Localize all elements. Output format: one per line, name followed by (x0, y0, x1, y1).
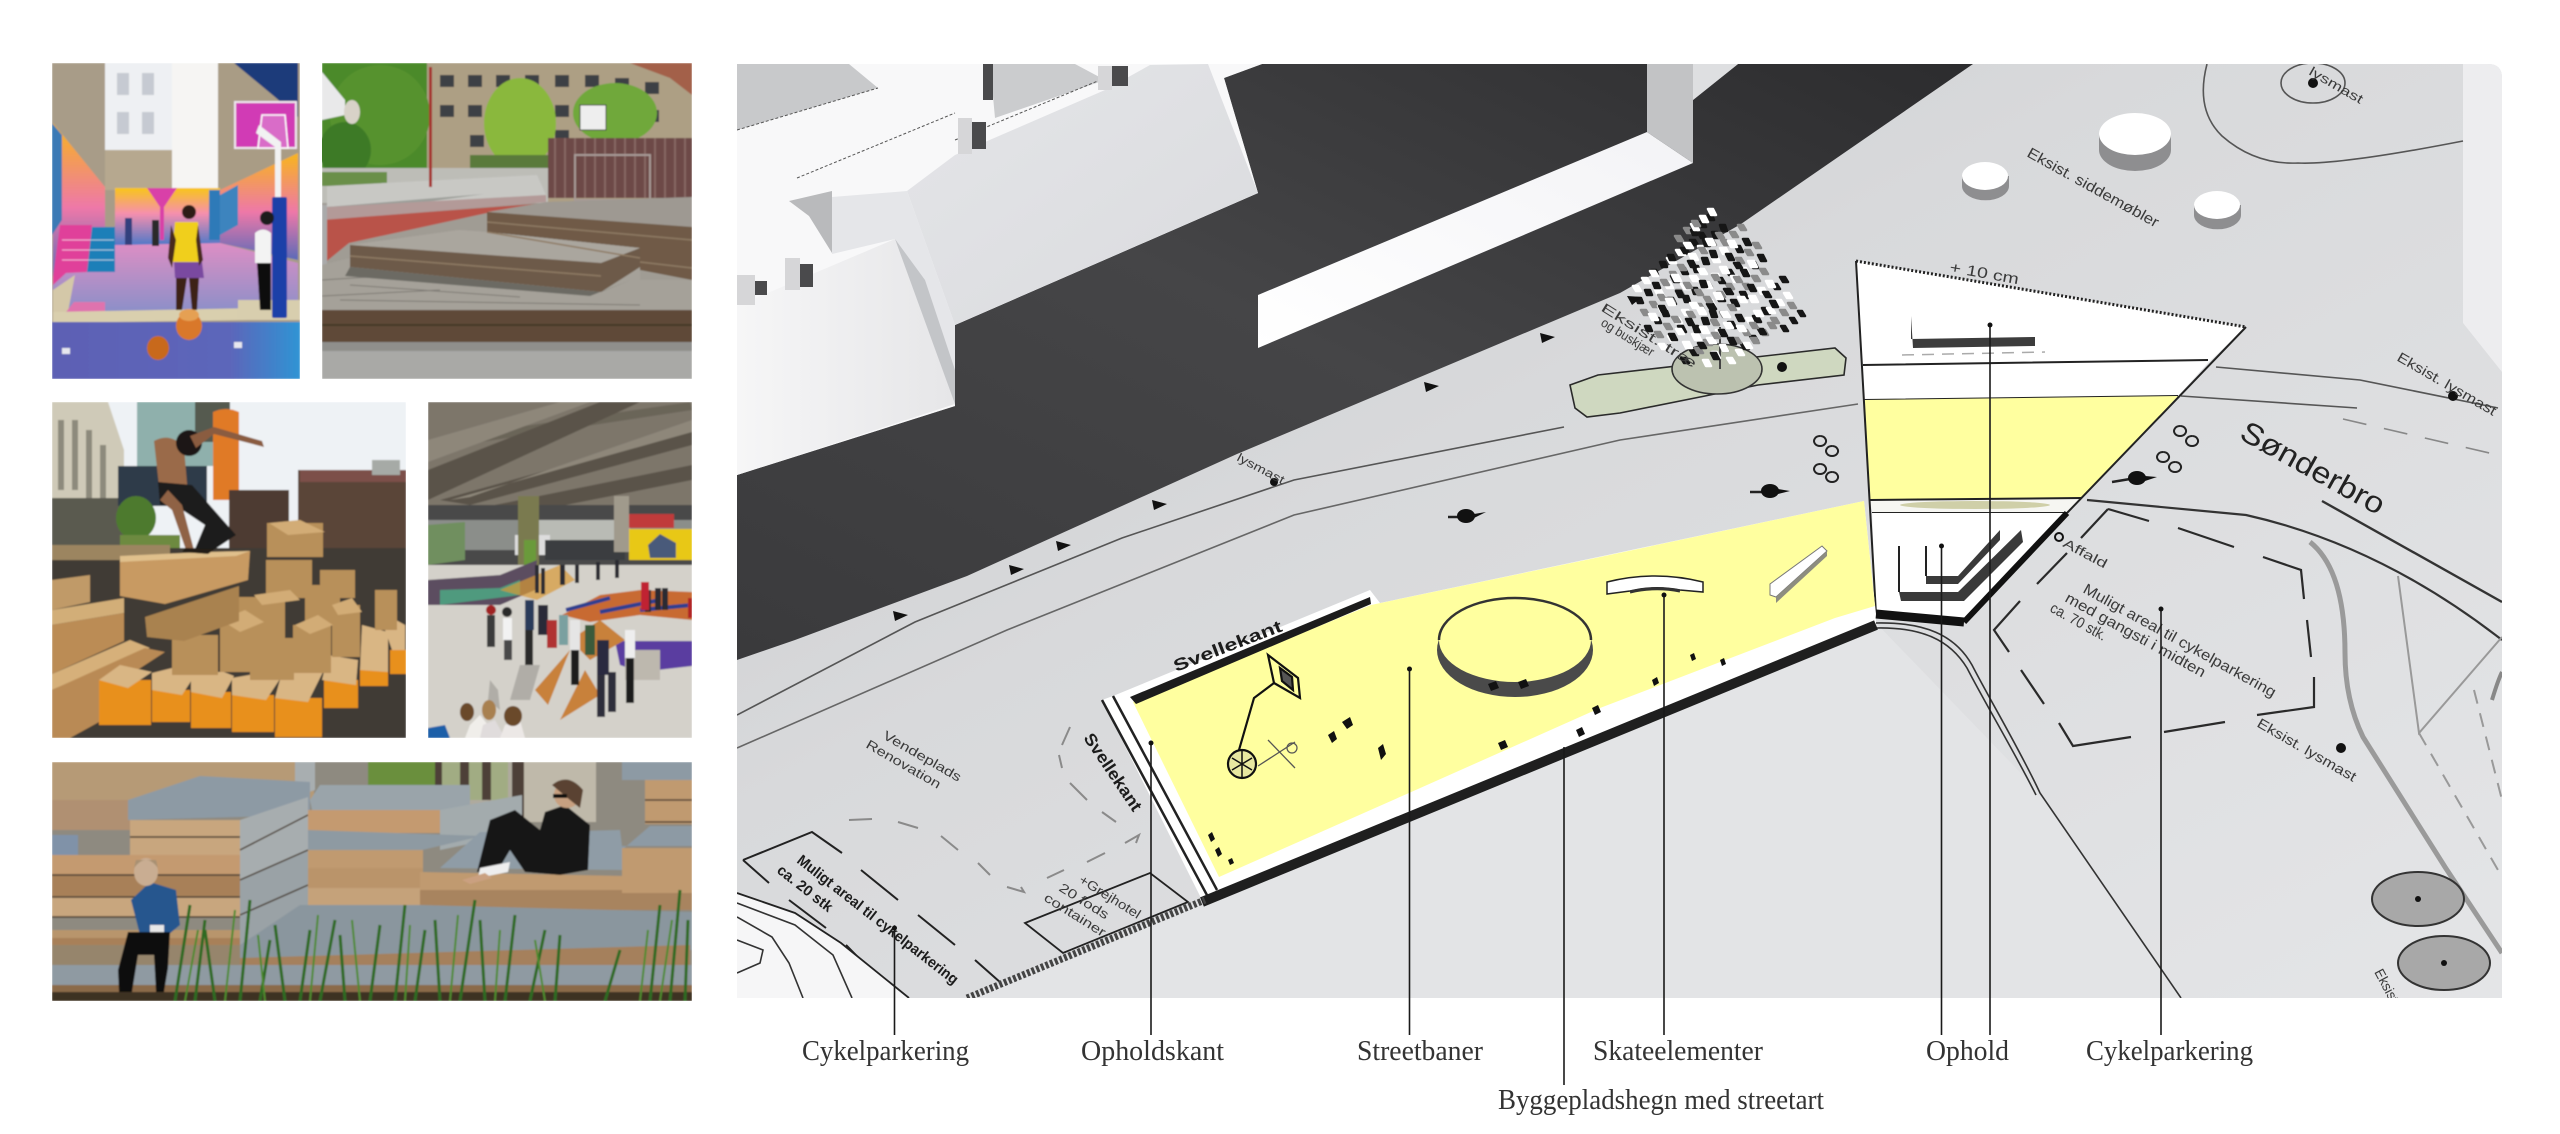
lamp dots (1270, 478, 1278, 486)
plan annotation texts: og buskjær (1598, 315, 1658, 360)
round planters (2372, 872, 2490, 990)
buildings: shadowed dark facades (737, 64, 1973, 660)
raised plaza: upper white terrace (1856, 261, 2246, 400)
plan annotation texts: container (1041, 890, 1109, 940)
plan annotation texts: Muligt areal til cykelparkering (794, 852, 962, 988)
plan annotation texts: Svellekant (1171, 617, 1285, 676)
photo: underpass street art gathering (428, 402, 692, 738)
bicycle symbols (1448, 426, 2198, 517)
plaza transition band (1870, 498, 2082, 513)
label: Cykelparkering: Cykelparkering (802, 1036, 969, 1067)
parking area left, container and turnaround linework (743, 727, 1188, 995)
plan annotation texts: Eksist. lysmast (2394, 349, 2500, 419)
svellekant and fence edges (967, 597, 1964, 998)
label: Streetbaner: Streetbaner (1357, 1036, 1484, 1067)
plan annotation texts: 20 fods (1056, 880, 1112, 923)
leader lines (892, 322, 2164, 1085)
photo: wooden stair deck at sports court (322, 63, 692, 379)
timber stack (172, 523, 397, 680)
girl (131, 882, 180, 935)
photo: colourful basketball court (52, 63, 300, 379)
plan annotation texts: Eksist. træ (1598, 300, 1700, 371)
plan annotation texts: Svellekant (1080, 730, 1146, 815)
plan annotation texts: Renovation (864, 737, 944, 792)
field markers and small symbols (893, 78, 2458, 865)
skate elements (1607, 546, 1827, 603)
basketball hoop and ball (1228, 655, 1300, 778)
plan annotation texts: Eksist. lysmast (2254, 715, 2360, 785)
plan annotation texts: lysmast (2306, 64, 2366, 107)
photo: timber terraced seating with people (52, 762, 692, 1001)
streetbaner: yellow field (1133, 501, 1875, 877)
plan annotation texts: ca. 20 stk (774, 862, 837, 916)
plan annotation texts: Eksist (2371, 966, 2402, 1005)
affald marker (2055, 533, 2063, 541)
plan linework: roads and curbs (737, 63, 2502, 998)
parking arrows (893, 296, 1642, 621)
site plan: 3D model of Sønderbro street area (737, 63, 2502, 1005)
plan annotation texts: Affald (2061, 535, 2110, 571)
plan annotation texts: med gangsti i midten (2062, 590, 2208, 681)
photo: parkour on timber blocks (52, 402, 406, 738)
plan annotation texts: + 10 cm (1948, 259, 2020, 288)
plan annotation texts: Vendeplads (880, 728, 965, 785)
buildings: light roofs (737, 64, 1262, 475)
building: right edge (2463, 64, 2502, 372)
parking area dashes right (1994, 509, 2314, 746)
streetbaner: white border (1102, 501, 1876, 900)
street ring element (1437, 598, 1593, 697)
woman (477, 805, 590, 875)
plan annotation texts: Sønderbro (2235, 415, 2391, 522)
plan annotation texts (774, 64, 2500, 1005)
plan annotation texts: +Grejhotel (1076, 872, 1144, 922)
raised plaza: lower white terrace with stairs (1856, 261, 2246, 622)
reeds (175, 890, 688, 1001)
label: Ophold: Ophold (1926, 1036, 2009, 1067)
seating bench: upper (1911, 316, 2035, 348)
label: Opholdskant: Opholdskant (1081, 1036, 1224, 1067)
plan annotation texts: ca. 70 stk. (2047, 600, 2110, 645)
existing seating cylinders (1962, 113, 2241, 229)
plan annotation texts: Eksist. siddemøbler (2024, 145, 2162, 231)
tree canopy (1633, 209, 1805, 366)
plan annotation texts: lysmast (1235, 450, 1288, 487)
label: Byggepladshegn med streetart: Byggepladshegn med streetart (1498, 1085, 1824, 1116)
crowd (535, 560, 668, 612)
corner curb with contour lines (737, 893, 909, 998)
label: Skateelementer: Skateelementer (1593, 1036, 1764, 1067)
plan annotation texts: Muligt areal til cykelparkering (2080, 581, 2279, 701)
yellow activity field: upper (1864, 396, 2178, 500)
bicycle symbols: solid (1457, 471, 2157, 523)
label: Cykelparkering right: Cykelparkering (2086, 1036, 2253, 1067)
orange bottoms (99, 650, 406, 737)
green planting bed with tree ring (1570, 327, 1846, 417)
